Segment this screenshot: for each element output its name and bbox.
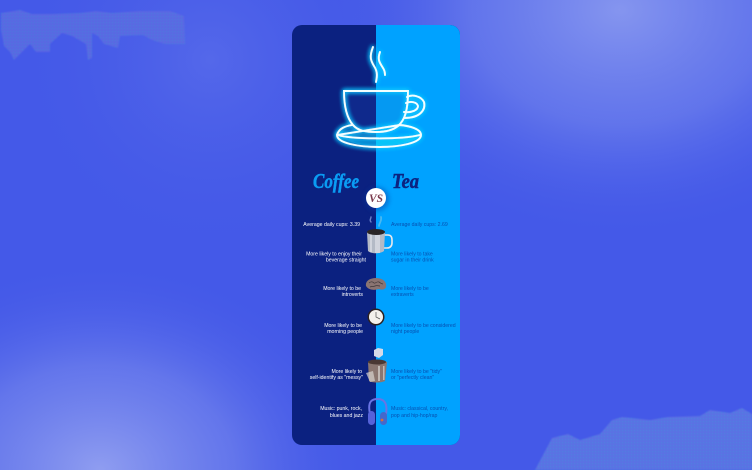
row 3 left text	[323, 286, 363, 298]
row 5 left text: self-identify as "messy"	[310, 375, 363, 381]
row 3 right text	[391, 286, 429, 298]
row 1 right text: Average daily cups: 2.69	[391, 222, 448, 228]
row 1 left text: Average daily cups: 3.39	[303, 222, 360, 228]
icon: headphones	[368, 399, 387, 425]
row 5 right text: More likely to be "tidy"	[391, 369, 442, 375]
row 6 right text	[391, 406, 448, 419]
heading: Tea: Tea	[392, 169, 419, 193]
row 2 right text	[391, 252, 434, 264]
icon: neon tea cup	[337, 47, 424, 147]
icon: brain	[366, 278, 386, 290]
row 4 right text: More likely to be considered	[391, 323, 456, 329]
row 5 left text	[310, 369, 363, 381]
row 4 right text	[391, 323, 456, 335]
row 2 right text: sugar in their drink	[391, 258, 434, 264]
row 3 right text: More likely to be	[391, 286, 429, 292]
row 4 left text	[324, 323, 363, 335]
dotted texture: bottom right	[535, 408, 752, 470]
row 6 right text: pop and hip-hop/rap	[391, 413, 438, 419]
heading: Coffee: Coffee	[313, 169, 359, 193]
row 5 left text: More likely to	[331, 369, 362, 375]
icon: crumpled paper and waste bin	[366, 348, 387, 382]
row 5 right text	[391, 369, 442, 381]
badge: VS: VS	[369, 193, 383, 205]
row 3 left text: More likely to be	[323, 286, 361, 292]
row 4 left text: More likely to be	[324, 323, 362, 329]
row 4 right text: night people	[391, 329, 419, 335]
panel: comparison card	[292, 25, 460, 445]
row 3 left text: introverts	[342, 292, 363, 298]
badge: VS	[365, 187, 389, 211]
row 2 right text: More likely to take	[391, 252, 433, 258]
row 2 left text: beverage straight	[326, 258, 367, 264]
row 6 right text: Music: classical, country,	[391, 406, 448, 412]
row 6 left text: blues and jazz	[330, 413, 363, 419]
dotted texture: top left	[1, 10, 185, 60]
row 2 left text	[306, 252, 367, 264]
row 6 left text	[320, 406, 363, 419]
row 4 left text: morning people	[327, 329, 363, 335]
row 5 right text: or "perfectly clean"	[391, 375, 434, 381]
row 6 left text: Music: punk, rock,	[320, 406, 362, 412]
icon: clock	[368, 308, 384, 326]
icon: coffee mug	[367, 217, 392, 253]
row 3 right text: extraverts	[391, 292, 414, 298]
row 2 left text: More likely to enjoy their	[306, 252, 362, 258]
